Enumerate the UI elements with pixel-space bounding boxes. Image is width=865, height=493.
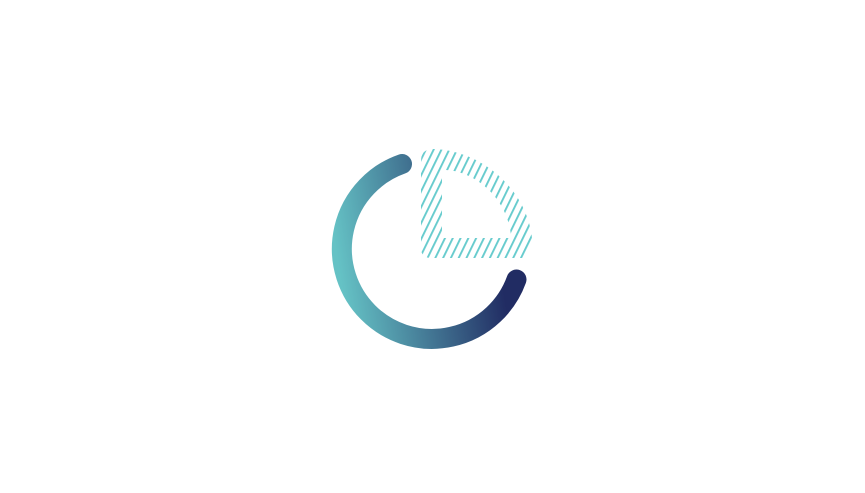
gradient progress ring (342, 164, 516, 339)
icon: pie chart progress (342, 143, 538, 339)
hatched pie slice (421, 149, 532, 258)
